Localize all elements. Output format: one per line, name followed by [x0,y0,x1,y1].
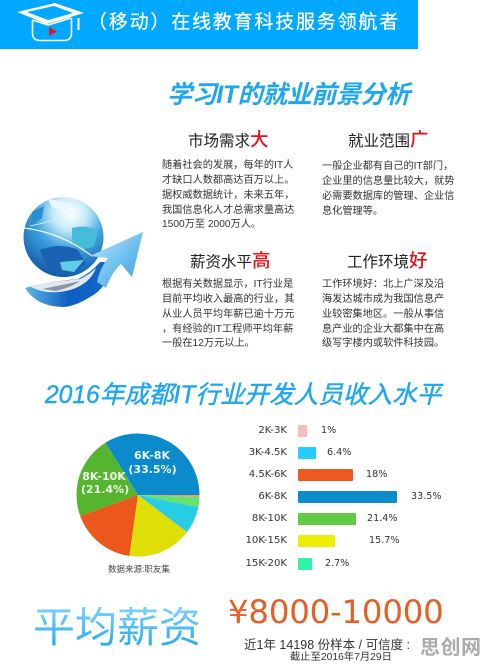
cutoff date note: 截止至2016年7月29日 [290,652,392,663]
row: 6K-8K: 6K-8K [258,491,287,502]
text block: employment range [322,160,454,216]
slice: 15K-20K [138,495,200,507]
heading: average salary: 平均薪资 [33,604,201,651]
text block: market demand: 随着社会的发展，每年的IT人 [162,160,293,171]
heading: salary level: 薪资水平高 [190,250,271,271]
slice: 8K-10K [76,443,138,516]
row: 3K-4.5K: 3K-4.5K [249,447,287,458]
row: 15K-20K: 2.7% [325,558,349,569]
panel: salary level [162,250,294,349]
row: 6K-8K [258,491,441,503]
panel: work environment [322,250,444,349]
text block: work environment: 海发达城市成为我国信息产 [322,294,444,305]
row: 2K-3K: 2K-3K [258,425,287,436]
slice: 4.5K-6K [80,495,138,556]
row: 4.5K-6K: 4.5K-6K [249,469,287,480]
text block: salary level: 根据有关数据显示，IT行业是 [162,279,293,290]
watermark: 思创网 [420,637,482,659]
text block: work environment: 息产业的企业大都集中在高 [322,324,444,334]
panel: employment range [322,129,454,216]
text block: work environment: 业较密集地区。一般从事信 [322,308,444,320]
title: career outlook: 学习IT的就业前景分析 [167,81,410,109]
slice: 2K-3K [138,495,200,497]
text block: market demand: 我国信息化人才总需求量高达 [162,204,294,216]
pie label: 6K-8K: 6K-8K [134,449,170,462]
header slogan: （移动）在线教育科技服务领航者 [88,12,400,32]
slice: 3K-4.5K [138,495,198,532]
panel: market demand [162,129,294,230]
row: 3K-4.5K [249,447,351,459]
illustration: globe and arrow [24,197,143,307]
text block: salary level: 一般在12万元以上。 [162,338,255,349]
swoosh base [25,262,112,307]
slice: 10K-15K [129,495,187,557]
text block: salary level: ，有经验的IT工程师平均年薪 [162,324,293,334]
bar chart [245,425,441,570]
row: 10K-15K: 15.7% [369,535,399,546]
slice: 6K-8K [105,433,200,495]
text block: employment range: 必需要数据库的管理、企业信 [322,190,454,202]
text block: work environment [322,278,444,349]
pie label: 8K-10K: 8K-10K [82,470,126,483]
sample size note: 近1年 14198 份样本 / 可信度 : [244,638,410,652]
text block: salary level: 从业人员平均年薪已逾十万元 [162,308,294,320]
row: 6K-8K: 33.5% [411,491,441,502]
row: 8K-10K [252,513,397,525]
text block: market demand: 据权威数据统计，未来五年， [162,190,294,200]
row: 10K-15K [245,535,399,547]
row: 8K-10K: 8K-10K [252,513,287,524]
row: 15K-20K [245,558,349,570]
header banner [0,0,418,49]
row: 10K-15K: 10K-15K [245,535,287,546]
pie label: 21.4%: (21.4%) [81,483,129,496]
salary range figure: ¥8000-10000 [228,592,444,630]
row: 8K-10K: 21.4% [367,513,397,524]
heading: work environment: 工作环境好 [347,250,428,271]
title: Chengdu IT salary: 2016年成都IT行业开发人员收入水平 [45,382,441,409]
globe [24,197,104,277]
text block: employment range: 一般企业都有自己的IT部门， [322,160,453,172]
row: 3K-4.5K: 6.4% [327,447,351,458]
row: 15K-20K: 15K-20K [245,558,287,569]
heading: market demand: 市场需求大 [188,129,269,150]
pie source note: 数据来源:职友集 [108,564,170,574]
pie chart [76,434,200,556]
text block: work environment: 级写字楼内或软件科技园。 [322,338,444,349]
text block: work environment: 工作环境好：北上广深及沿 [322,279,444,290]
text block: market demand: 1500万至 2000万人。 [162,219,261,230]
text block: salary level [162,278,294,349]
row: 4.5K-6K [249,469,387,481]
row: 2K-3K: 1% [321,425,336,436]
row: 4.5K-6K: 18% [366,469,387,480]
text block: employment range: 企业里的信息量比较大，就势 [322,176,454,186]
text block: employment range: 息化管理等。 [322,206,383,216]
heading: employment range: 就业范围广 [348,129,429,150]
icon: graduation cap with play button [17,3,84,42]
text block: salary level: 目前平均收入最高的行业，其 [162,294,294,305]
pie label: 33.5%: (33.5%) [128,463,177,476]
text block: market demand: 才缺口人数都高达百万以上。 [162,175,294,186]
arrow [90,232,143,288]
row: 2K-3K [258,425,336,437]
swoosh inner bowl [29,268,96,292]
text block: market demand [162,159,294,230]
